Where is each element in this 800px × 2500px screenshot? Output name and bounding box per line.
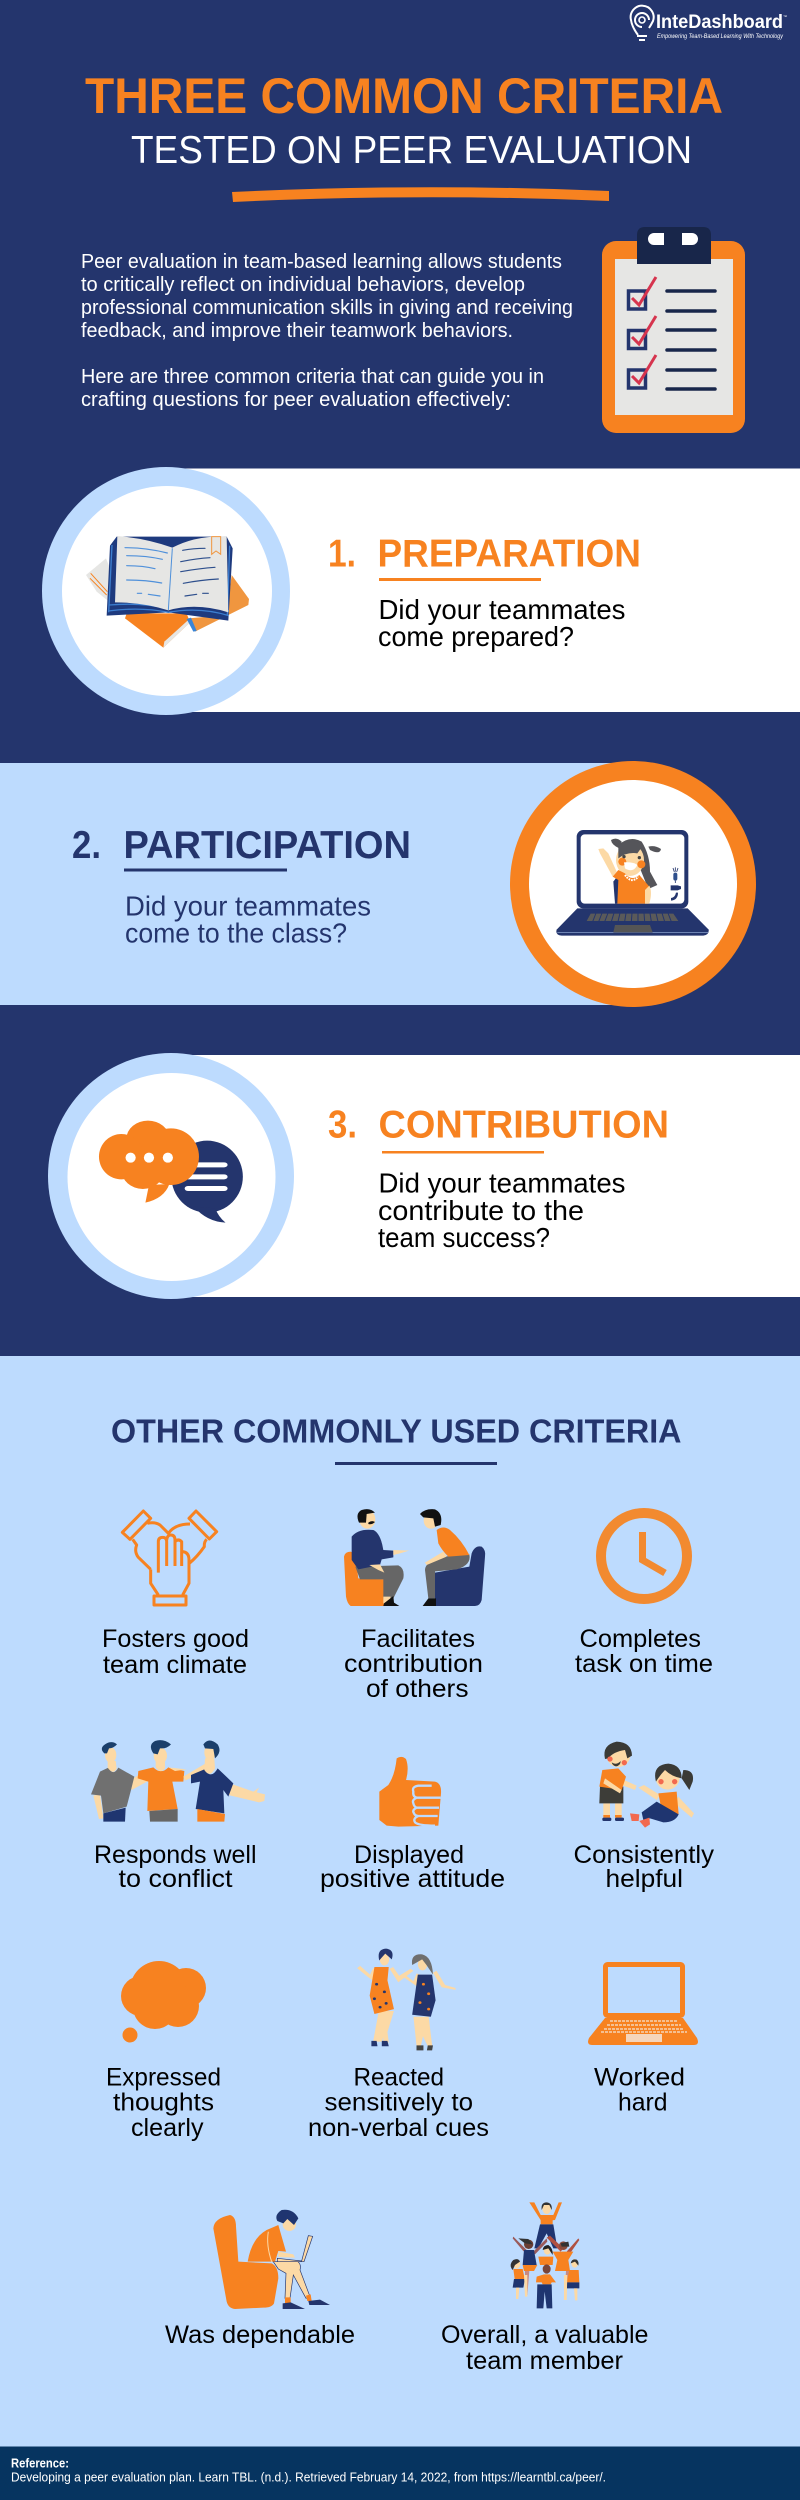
label: reacted sensitively to non-verbal cues: non-verbal cues <box>308 2114 489 2142</box>
logo: InteDashboard <box>631 6 787 40</box>
label: overall, a valuable team member <box>441 2321 648 2375</box>
inner circle <box>62 486 272 696</box>
label: consistently helpful <box>574 1841 715 1893</box>
icon: cheerleader pyramid <box>511 2202 579 2308</box>
logo: InteDashboard: Empowering Team-Based Learning With Technology <box>657 34 784 40</box>
ring <box>510 761 756 1007</box>
icon: two people talking in chairs <box>344 1509 485 1606</box>
label: facilitates contribution of others <box>344 1625 483 1703</box>
heading: PREPARATION <box>378 532 641 576</box>
panel band <box>175 1055 800 1297</box>
heading: CONTRIBUTION <box>378 1104 669 1146</box>
icon: orange laptop <box>588 1964 698 2045</box>
icon: two dancing women <box>357 1949 456 2050</box>
panel: participation <box>0 761 756 1007</box>
panel band <box>170 468 800 712</box>
panel: contribution <box>48 1053 800 1299</box>
label: reacted sensitively to non-verbal cues <box>308 2064 489 2142</box>
label: facilitates contribution of others: of others <box>366 1675 468 1703</box>
label: completes task on time <box>575 1625 713 1678</box>
question text: come to the class? <box>125 918 347 948</box>
section background <box>0 1356 800 2447</box>
heading: 2. <box>72 824 101 867</box>
section heading: OTHER COMMONLY USED CRITERIA <box>111 1412 682 1450</box>
label: worked hard <box>594 2064 685 2116</box>
label: expressed thoughts clearly <box>106 2064 221 2142</box>
reference footer: Reference: <box>11 2456 69 2470</box>
intro text block <box>81 251 573 411</box>
orange brush underline <box>232 187 609 202</box>
label: displayed positive attitude: Displayed <box>354 1841 464 1869</box>
title <box>85 68 723 172</box>
ring <box>48 1053 294 1299</box>
intro text block: crafting questions for peer evaluation effectively: <box>81 389 511 411</box>
label: responds well to conflict: Responds well <box>94 1841 256 1869</box>
icon: stacked hands <box>122 1511 217 1605</box>
label: consistently helpful: helpful <box>606 1865 683 1893</box>
title: THREE COMMON CRITERIA <box>85 68 723 124</box>
title: TESTED ON PEER EVALUATION <box>131 129 692 172</box>
label: reacted sensitively to non-verbal cues: Reacted <box>354 2064 444 2092</box>
label: responds well to conflict: to conflict <box>118 1865 233 1893</box>
panel: other commonly used criteria <box>0 1356 800 2447</box>
question text: team success? <box>378 1222 550 1253</box>
question text: Did your teammates <box>125 890 371 922</box>
icon: boy helping girl up <box>599 1742 694 1828</box>
inner circle <box>529 780 737 988</box>
label: overall, a valuable team member: team member <box>466 2347 623 2375</box>
label: expressed thoughts clearly: Expressed <box>106 2064 221 2092</box>
navy background <box>0 0 800 1356</box>
intro text block: Peer evaluation in team-based learning allows students <box>81 251 562 273</box>
intro text block: Here are three common criteria that can guide you in <box>81 366 544 388</box>
label: fosters good team climate: team climate <box>103 1651 247 1679</box>
icon: speech bubbles <box>99 1121 243 1223</box>
label: facilitates contribution of others: Facilitates <box>361 1625 475 1653</box>
icon: clock <box>601 1513 687 1599</box>
label: expressed thoughts clearly: thoughts <box>113 2088 214 2116</box>
label: completes task on time: Completes <box>580 1625 701 1653</box>
label: consistently helpful: Consistently <box>574 1841 715 1869</box>
label: facilitates contribution of others: contribution <box>344 1650 483 1678</box>
label: completes task on time: task on time <box>575 1650 713 1678</box>
label: fosters good team climate: Fosters good <box>102 1625 249 1653</box>
icon: person on armchair with laptop <box>213 2210 330 2309</box>
question text <box>125 890 371 948</box>
logo: InteDashboard: InteDashboard <box>656 12 783 33</box>
question text: come prepared? <box>378 621 574 652</box>
intro text block: feedback, and improve their teamwork behaviors. <box>81 320 513 342</box>
intro text block: to critically reflect on individual behaviors, develop <box>81 274 525 296</box>
heading underline <box>335 1462 497 1465</box>
label: displayed positive attitude <box>320 1841 505 1893</box>
heading underline <box>124 868 287 872</box>
question text <box>378 594 626 652</box>
heading underline <box>382 1151 544 1154</box>
question text: contribute to the <box>378 1195 584 1226</box>
label: expressed thoughts clearly: clearly <box>131 2114 204 2142</box>
intro text block: professional communication skills in giving and receiving <box>81 297 573 319</box>
label: responds well to conflict <box>94 1841 256 1893</box>
question text: Did your teammates <box>378 1168 626 1198</box>
logo: InteDashboard: ™ <box>783 14 787 19</box>
label: was dependable: Was dependable <box>165 2321 355 2349</box>
label: fosters good team climate <box>102 1625 249 1679</box>
heading underline <box>379 578 541 581</box>
label: reacted sensitively to non-verbal cues: sensitively to <box>324 2088 473 2116</box>
inner circle <box>68 1073 276 1281</box>
panel band <box>0 763 640 1005</box>
reference footer: Developing a peer evaluation plan. Learn TBL. (n.d.). Retrieved February 14, 2022, from https://learntbl.ca/peer/. <box>11 2470 606 2484</box>
question text: Did your teammates <box>378 594 626 625</box>
heading: 1. <box>328 532 356 576</box>
icon: laptop with girl on screen <box>556 830 709 936</box>
panel: preparation <box>42 467 800 715</box>
icon: thought cloud <box>121 1961 206 2042</box>
icon: thumbs up <box>379 1757 441 1827</box>
question text <box>378 1168 626 1253</box>
reference footer <box>0 2446 800 2500</box>
label: displayed positive attitude: positive attitude <box>320 1865 505 1893</box>
heading: 3. <box>328 1104 357 1146</box>
icon: three men with arms around shoulders <box>91 1740 265 1822</box>
icon: clipboard checklist <box>602 227 745 433</box>
ring <box>42 467 290 715</box>
label: worked hard: Worked <box>594 2064 685 2092</box>
heading: PARTICIPATION <box>124 824 411 867</box>
icon: open book on books <box>86 536 249 648</box>
label: worked hard: hard <box>618 2088 668 2116</box>
label: overall, a valuable team member: Overall, a valuable <box>441 2321 648 2349</box>
